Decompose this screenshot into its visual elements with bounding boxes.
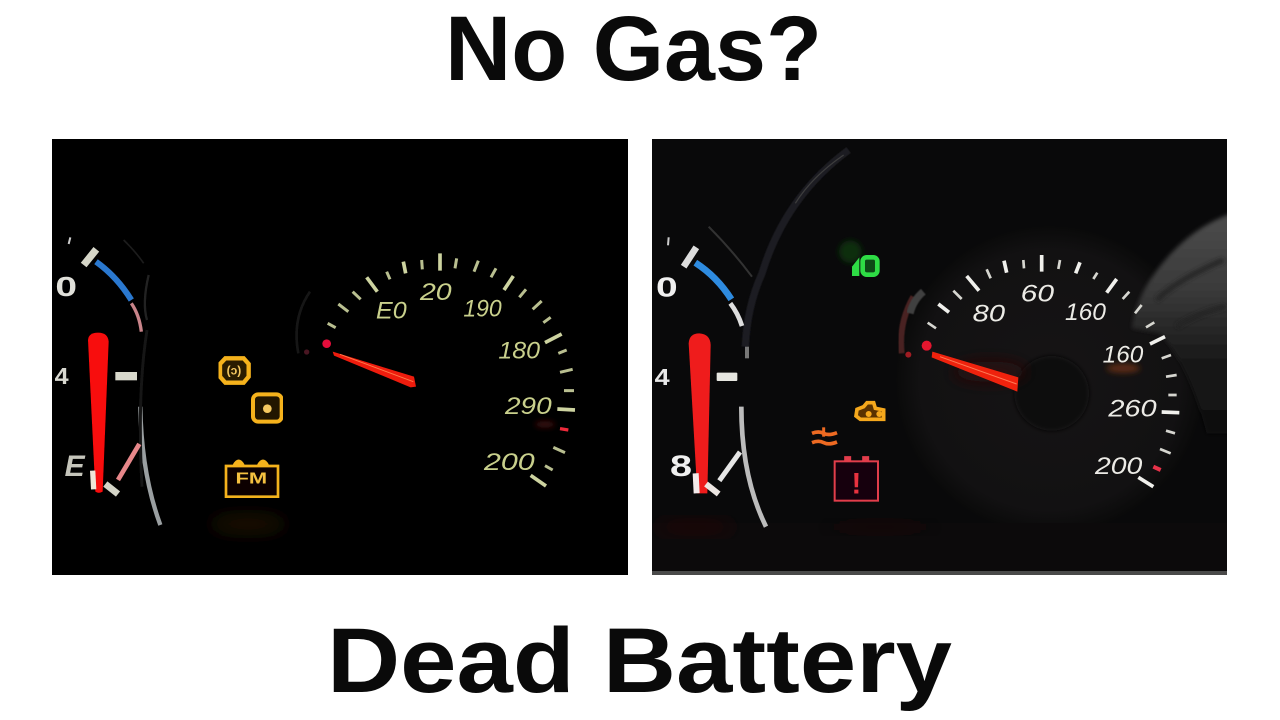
fuel gauge: dead battery: 0 (656, 272, 678, 303)
icon: battery warning: FM (235, 470, 267, 487)
warning icons (220, 358, 282, 497)
title: No Gas?: No Gas? (445, 0, 822, 100)
speedometer: dead battery: 80 (973, 301, 1006, 328)
icon: battery warning (835, 457, 878, 501)
panel: dead battery dashboard (652, 139, 1232, 575)
speedometer: dead battery: 160 (1103, 341, 1144, 368)
speedometer: no gas: 200 (483, 449, 535, 476)
warning lights (812, 240, 884, 501)
speedometer: dead battery: 160 (1065, 299, 1107, 326)
icon: green indicator (839, 240, 877, 276)
gauge reflection and face (897, 213, 1232, 533)
fuel gauge: no gas: 0 (55, 271, 77, 302)
speedometer: no gas: 190 (463, 296, 502, 323)
speedometer: no gas: 290 (504, 393, 552, 420)
caption: Dead Battery: Dead Battery (327, 610, 952, 712)
speedometer: dead battery: 200 (1094, 453, 1143, 480)
icon: battery warning: ! (851, 467, 861, 500)
speedometer: dead battery: 60 (1021, 281, 1055, 308)
speedometer: no gas: 180 (498, 337, 541, 364)
icon: oil warning (253, 394, 282, 422)
speedometer: dead battery (905, 255, 1179, 487)
bottom dash strip (652, 523, 1227, 575)
icon: brake warning: (ↄ) (227, 363, 241, 377)
fuel gauge: no gas: 4 (55, 363, 69, 389)
speedometer: no gas: E0 (376, 297, 407, 324)
speedometer: no gas (297, 253, 585, 507)
fuel gauge: dead battery: 4 (655, 364, 670, 390)
icon: check engine (856, 403, 884, 419)
fuel gauge: no gas: E (65, 450, 86, 483)
speedometer: dead battery: 260 (1107, 396, 1157, 423)
panel: no gas dashboard (52, 139, 628, 575)
icon: coolant warning (812, 427, 837, 444)
speedometer: no gas: 20 (419, 279, 452, 306)
fuel gauge: dead battery: 8 (670, 450, 692, 483)
fuel gauge: dead battery (655, 150, 849, 527)
fuel gauge: no gas (55, 237, 160, 525)
